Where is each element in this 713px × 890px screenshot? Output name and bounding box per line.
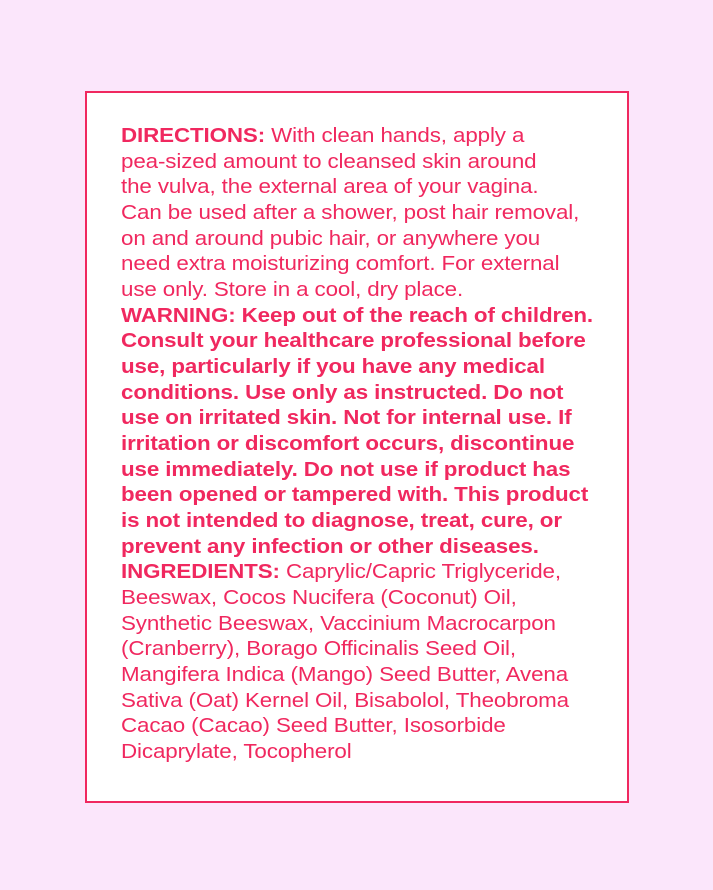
- text block: directions, warning, ingredients: conditions. Use only as instructed. Do not: [121, 381, 563, 404]
- text block: directions, warning, ingredients: Beeswax, Cocos Nucifera (Coconut) Oil,: [121, 586, 517, 609]
- text block: directions, warning, ingredients: DIRECTIONS: With clean hands, apply a: [121, 124, 524, 147]
- text block: directions, warning, ingredients: (Cranberry), Borago Officinalis Seed Oil,: [121, 637, 516, 660]
- text block: directions, warning, ingredients: use, particularly if you have any medical: [121, 355, 545, 378]
- text block: directions, warning, ingredients: Consult your healthcare professional before: [121, 329, 586, 352]
- text block: directions, warning, ingredients: irritation or discomfort occurs, discontinue: [121, 432, 574, 455]
- text block: directions, warning, ingredients: been opened or tampered with. This product: [121, 483, 588, 506]
- text block: directions, warning, ingredients: [121, 124, 593, 763]
- text block: directions, warning, ingredients: Dicaprylate, Tocopherol: [121, 740, 352, 763]
- text block: directions, warning, ingredients: use immediately. Do not use if product has: [121, 458, 570, 481]
- text block: directions, warning, ingredients: on and around pubic hair, or anywhere you: [121, 227, 540, 250]
- text block: directions, warning, ingredients: Mangifera Indica (Mango) Seed Butter, Avena: [121, 663, 568, 686]
- text block: directions, warning, ingredients: Synthetic Beeswax, Vaccinium Macrocarpon: [121, 612, 556, 635]
- text block: directions, warning, ingredients: Sativa (Oat) Kernel Oil, Bisabolol, Theobroma: [121, 689, 569, 712]
- text block: directions, warning, ingredients: prevent any infection or other diseases.: [121, 535, 539, 558]
- text block: directions, warning, ingredients: is not intended to diagnose, treat, cure, or: [121, 509, 562, 532]
- panel: label box: [85, 91, 629, 803]
- text block: directions, warning, ingredients: use on irritated skin. Not for internal use. If: [121, 406, 572, 429]
- text block: directions, warning, ingredients: WARNING: Keep out of the reach of children.: [121, 304, 593, 327]
- text block: directions, warning, ingredients: the vulva, the external area of your vagina.: [121, 175, 539, 198]
- text block: directions, warning, ingredients: use only. Store in a cool, dry place.: [121, 278, 463, 301]
- text block: directions, warning, ingredients: INGREDIENTS: Caprylic/Capric Triglyceride,: [121, 560, 561, 583]
- text block: directions, warning, ingredients: pea-sized amount to cleansed skin around: [121, 150, 536, 173]
- text block: directions, warning, ingredients: Cacao (Cacao) Seed Butter, Isosorbide: [121, 714, 506, 737]
- text block: directions, warning, ingredients: Can be used after a shower, post hair removal,: [121, 201, 579, 224]
- text block: directions, warning, ingredients: need extra moisturizing comfort. For external: [121, 252, 559, 275]
